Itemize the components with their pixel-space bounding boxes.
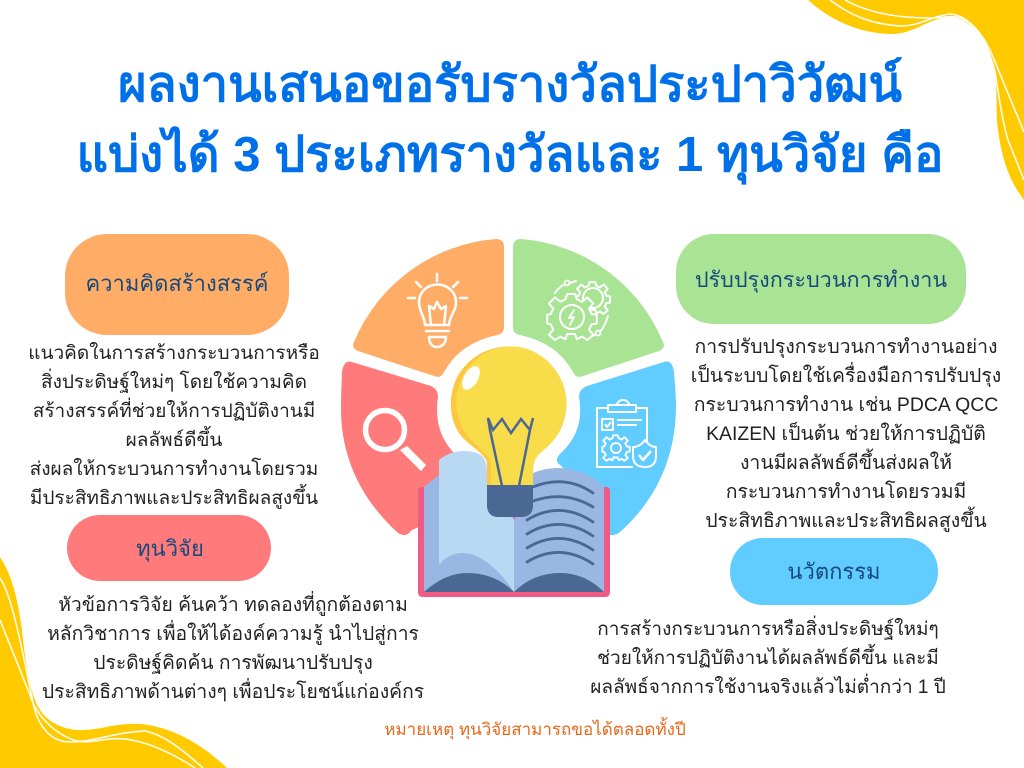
text block: innovation: ผลลัพธ์จากการใช้งานจริงแล้วไม่ต่ำกว่า 1 ปี	[590, 677, 946, 698]
icon: central light bulb	[451, 346, 566, 490]
text block: process improvement: กระบวนการทำงาน เช่น PDCA QCC	[694, 394, 998, 416]
text block: research grant: ประสิทธิภาพด้านต่างๆ เพื่อประโยชน์แก่องค์กร	[42, 682, 424, 703]
text block: process improvement	[691, 336, 1001, 532]
pill: creativity: ความคิดสร้างสรรค์	[85, 271, 269, 296]
icon: open book	[418, 451, 610, 597]
text block: process improvement: เป็นระบบโดยใช้เครื่องมือการปรับปรุง	[691, 365, 1001, 387]
text block: process improvement: งานมีผลลัพธ์ดีขึ้นส่งผลให้	[740, 452, 952, 474]
pill: innovation: นวัตกรรม	[787, 559, 881, 584]
icon: clipboard with gear and shield	[597, 400, 656, 467]
text block: innovation: ช่วยให้การปฏิบัติงานได้ผลลัพธ์ดีขึ้น และมี	[597, 648, 939, 669]
text block: process improvement: กระบวนการทำงานโดยรวมมี	[726, 481, 966, 503]
wheel segment: blue	[557, 361, 676, 535]
text block: process improvement: การปรับปรุงกระบวนการทำงานอย่าง	[694, 336, 997, 358]
text block: creativity	[28, 342, 320, 509]
title	[77, 57, 943, 185]
text block: innovation	[590, 616, 946, 698]
pill: research grant: ทุนวิจัย	[136, 536, 204, 560]
wheel segment: orange	[353, 239, 504, 377]
text block: process improvement: ประสิทธิภาพและประสิทธิผลสูงขึ้น	[705, 510, 987, 532]
pill: research grant	[67, 515, 271, 581]
icon: magnifying glass	[366, 410, 426, 471]
pill: process improvement: ปรับปรุงกระบวนการทำงาน	[695, 266, 947, 292]
text block: research grant	[42, 591, 424, 703]
text block: creativity: สร้างสรรค์ที่ช่วยให้การปฏิบัติงานมี	[33, 401, 315, 422]
bottom left yellow wave	[0, 557, 227, 768]
text block: creativity: ส่งผลให้กระบวนการทำงานโดยรวม	[30, 459, 318, 480]
pill: creativity	[65, 234, 289, 335]
footnote: หมายเหตุ ทุนวิจัยสามารถขอได้ตลอดทั้งปี	[384, 720, 686, 739]
text block: research grant: หลักวิชาการ เพื่อให้ได้องค์ความรู้ นำไปสู่การ	[47, 624, 419, 645]
pill: process improvement	[676, 234, 966, 324]
text block: creativity: มีประสิทธิภาพและประสิทธิผลสูงขึ้น	[30, 488, 318, 509]
title: แบ่งได้ 3 ประเภทรางวัลและ 1 ทุนวิจัย คือ	[77, 128, 943, 182]
top right yellow wave	[808, 0, 1024, 200]
wheel segment: green	[513, 239, 664, 377]
text block: innovation: การสร้างกระบวนการหรือสิ่งประดิษฐ์ใหม่ๆ	[597, 619, 939, 640]
text block: process improvement: KAIZEN เป็นต้น ช่วยให้การปฏิบัติ	[706, 423, 986, 445]
title: ผลงานเสนอขอรับรางวัลประปาวิวัฒน์	[118, 58, 902, 112]
text block: creativity: แนวคิดในการสร้างกระบวนการหรือ	[28, 343, 320, 364]
text block: research grant: หัวข้อการวิจัย ค้นคว้า ทดลองที่ถูกต้องตาม	[58, 595, 408, 616]
text block: creativity: สิ่งประดิษฐ์ใหม่ๆ โดยใช้ความคิด	[41, 372, 307, 393]
icon: gears	[547, 280, 610, 340]
text block: creativity: ผลลัพธ์ดีขึ้น	[126, 430, 222, 451]
pill: innovation	[730, 538, 938, 605]
wheel segment: red	[341, 361, 480, 535]
text block: research grant: ประดิษฐ์คิดค้น การพัฒนาปรับปรุง	[93, 653, 373, 674]
icon: light bulb outline	[408, 274, 467, 347]
